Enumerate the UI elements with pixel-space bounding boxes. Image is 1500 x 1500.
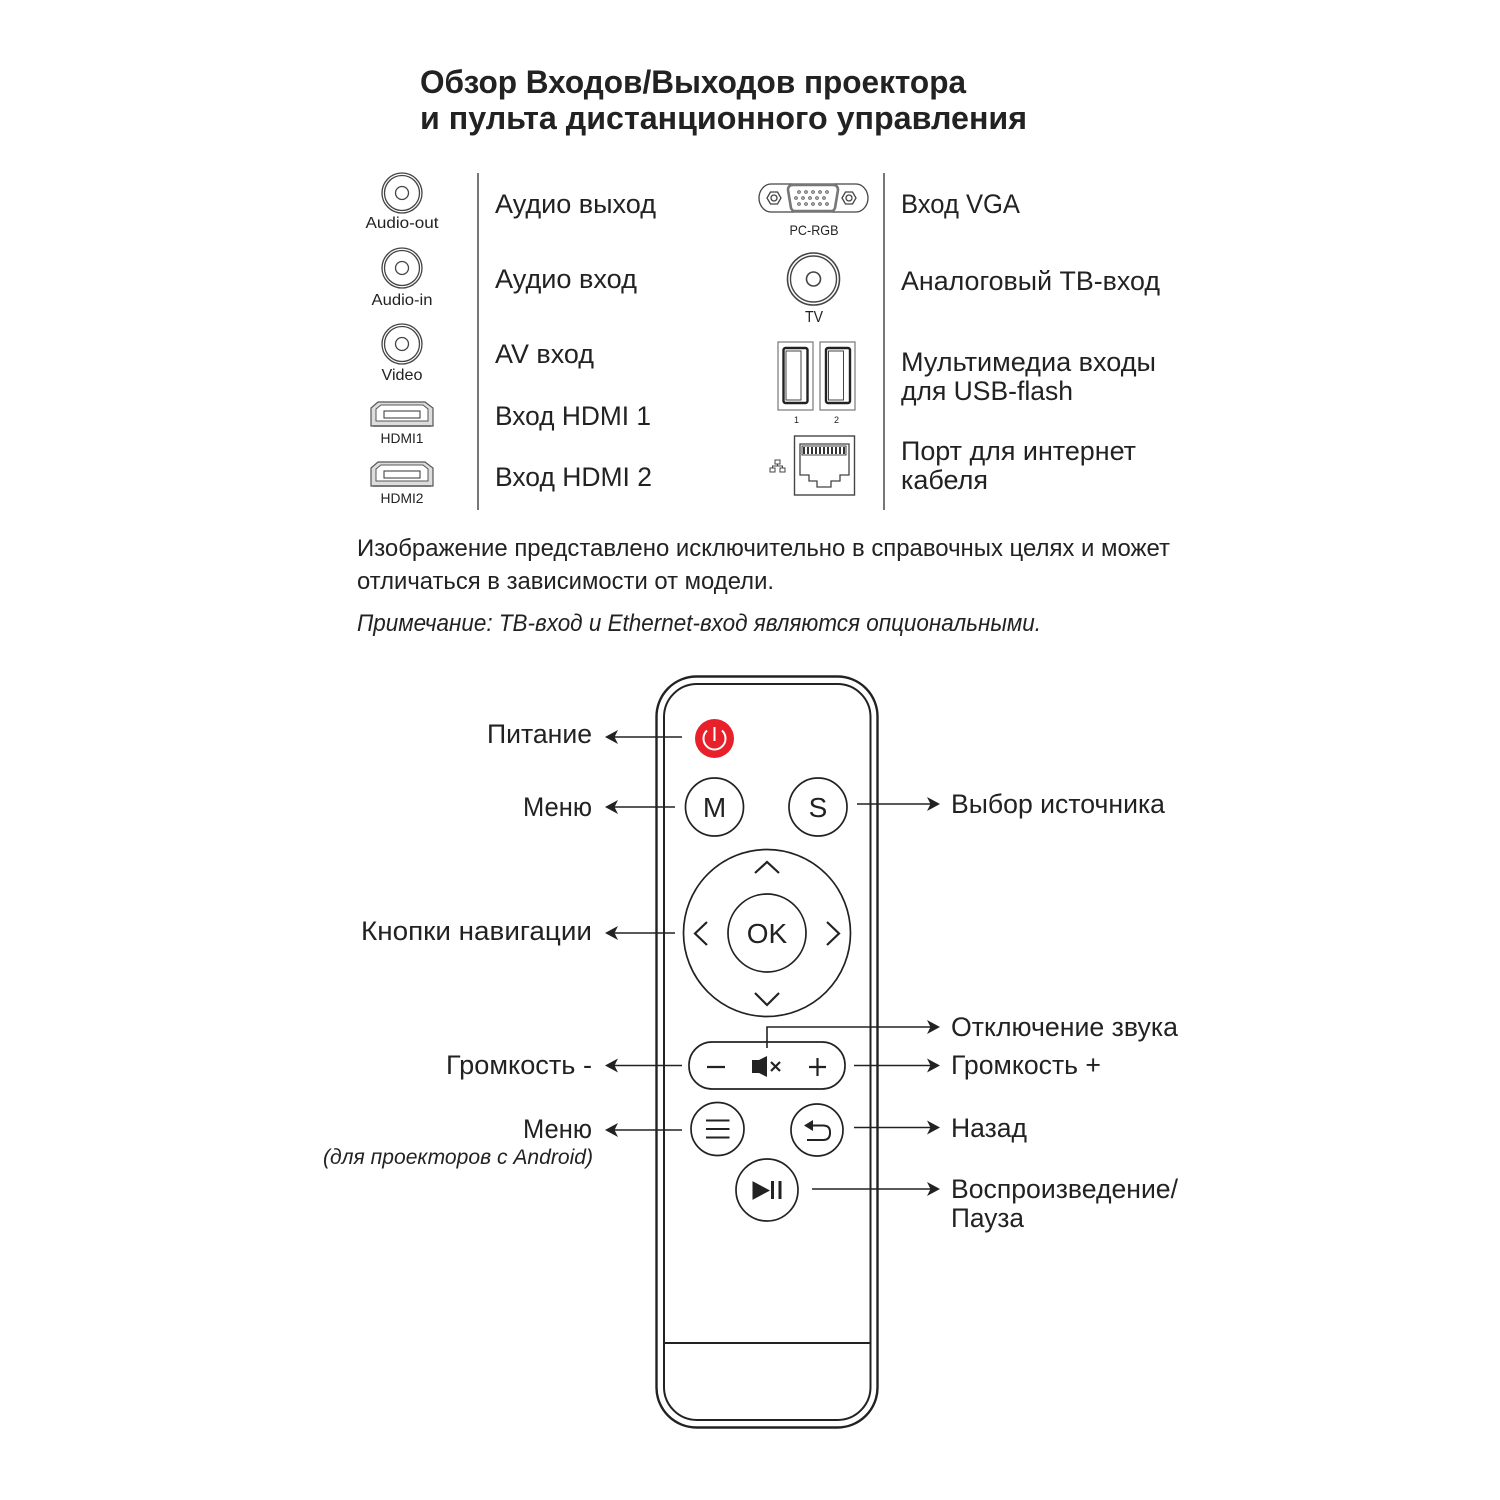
callout: volume down: Громкость - [446,1050,592,1080]
callout: back: Назад [951,1113,1027,1143]
icon: usb ports: 1 [794,415,799,425]
icon: tv port: TV [805,309,823,326]
label: av in: AV вход [495,339,594,369]
icon: audio-out port [366,173,439,232]
icon: vga port: PC-RGB [790,222,838,238]
callout: back [854,1113,1027,1143]
icon: hdmi 1 port: HDMI1 [380,430,424,446]
label: usb in: Мультимедиа входы [901,347,1156,377]
navigation pad [684,850,850,1016]
panel: remote control [656,676,878,1428]
label: tv in: Аналоговый ТВ-вход [901,266,1160,296]
label: audio out: Аудио выход [495,189,656,219]
button: M [686,778,744,836]
label: hdmi 1: Вход HDMI 1 [495,401,651,431]
title: и пульта дистанционного управления [420,100,1027,136]
icon: audio-out port: Audio-out [366,215,439,232]
callout: volume down [446,1050,682,1080]
button: power [695,719,734,758]
icon: usb ports [778,342,855,425]
panel: right ports [759,173,1160,510]
callout: menu [523,792,675,822]
callout: power [487,719,682,749]
callout: play pause: Пауза [951,1203,1025,1233]
label: ethernet: Порт для интернет [901,436,1136,466]
icon: hdmi 1 port [371,402,433,446]
callout: source: Выбор источника [951,789,1166,819]
label: ethernet: кабеля [901,465,988,495]
label: ethernet [901,436,1136,495]
icon: vga port [759,184,868,238]
callout: mute: Отключение звука [951,1012,1179,1042]
button: M: M [703,792,726,823]
callout: source [857,789,1166,819]
callout: volume up: Громкость + [951,1050,1101,1080]
callout: power: Питание [487,719,592,749]
volume rocker [689,1042,845,1089]
icon: usb ports: 2 [834,415,839,425]
callout: mute [767,1012,1179,1048]
icon: audio-in port [372,248,432,309]
panel: left ports [366,173,656,510]
label: vga in: Вход VGA [901,189,1020,219]
callout: menu: Меню [523,792,592,822]
icon: audio-in port: Audio-in [372,292,432,309]
callout: android menu: Меню [523,1114,592,1144]
label: audio in: Аудио вход [495,264,637,294]
icon: video port [382,324,423,384]
text block: disclaimer [357,535,1170,595]
callout: android menu: (для проекторов с Android) [323,1146,593,1169]
icon: tv port [788,253,840,326]
callout: navigation: Кнопки навигации [361,916,592,946]
title: Обзор Входов/Выходов проектора [420,64,966,100]
text block: disclaimer: отличаться в зависимости от модели. [357,568,774,595]
callout: volume up [854,1050,1101,1080]
button: back [791,1104,843,1156]
callout: play pause [812,1174,1178,1233]
label: usb in [901,347,1156,406]
label: hdmi 2: Вход HDMI 2 [495,462,652,492]
title [420,64,1027,136]
text block: note: Примечание: ТВ-вход и Ethernet-вход являются опциональными. [357,610,1041,637]
icon: ethernet port [770,436,854,495]
button: S: S [809,792,827,823]
icon: video port: Video [382,367,423,384]
remote body [656,676,878,1428]
navigation pad: OK [747,918,788,949]
button: android menu [691,1102,744,1156]
button: play pause [736,1159,798,1221]
callout: play pause: Воспроизведение/ [951,1174,1178,1204]
text block: disclaimer: Изображение представлено исключительно в справочных целях и может [357,535,1170,562]
label: usb in: для USB-flash [901,376,1073,406]
callout: android menu [323,1114,682,1169]
button: S [789,778,847,836]
icon: hdmi 2 port [371,462,433,506]
icon: hdmi 2 port: HDMI2 [380,490,424,506]
